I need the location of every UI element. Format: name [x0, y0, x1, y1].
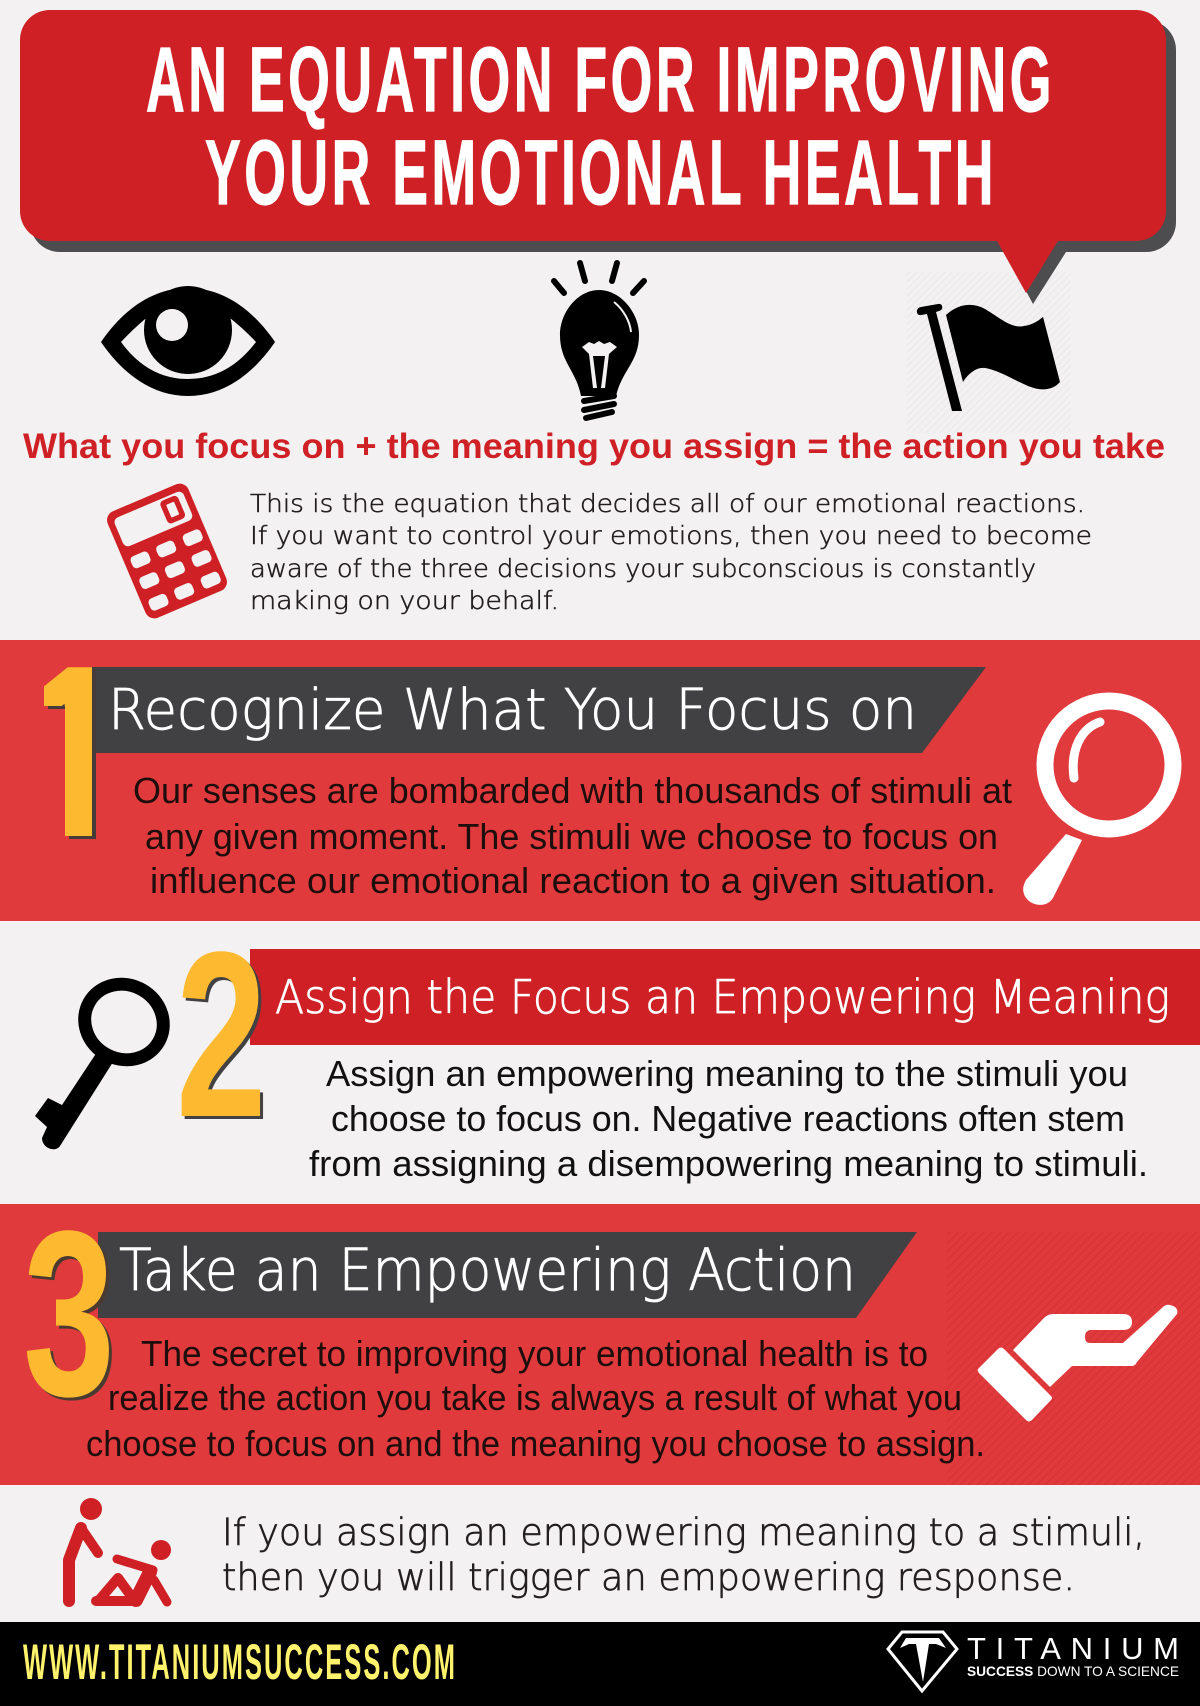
- intro paragraph: This is the equation that decides all of our emotional reactions.: [250, 489, 1085, 518]
- step 2 body: Assign an empowering meaning to the stimuli you: [326, 1053, 1128, 1094]
- step 3 number: 3: [23, 1183, 115, 1446]
- step 1 heading ribbon: [92, 667, 986, 753]
- intro paragraph: If you want to control your emotions, then you need to become: [250, 521, 1092, 550]
- icon: eye: [101, 286, 275, 396]
- footer bar: [0, 1622, 1200, 1706]
- title text: [146, 29, 1055, 224]
- icon: key: [35, 970, 177, 1149]
- step 1 number: 1: [26, 621, 133, 891]
- step 1 number: [44, 667, 96, 839]
- icon: light bulb: [554, 263, 644, 418]
- step 1 body: influence our emotional reaction to a given situation.: [150, 860, 996, 901]
- step 2 number: 2: [179, 905, 270, 1169]
- step 2 body: from assigning a disempowering meaning to stimuli.: [309, 1143, 1148, 1184]
- step 3 number: 3: [26, 1186, 118, 1449]
- icon: person helping another up: [69, 1498, 171, 1602]
- panel: step 1: [0, 618, 1200, 921]
- step 2 number: 2: [176, 902, 267, 1166]
- step 1 number: 1: [22, 618, 129, 888]
- logo wordmark: TITANIUM: [967, 1631, 1179, 1666]
- closing text: then you will trigger an empowering response.: [222, 1556, 1075, 1599]
- step 3 body: realize the action you take is always a result of what you: [108, 1377, 962, 1418]
- logo: titanium diamond: [888, 1632, 957, 1691]
- panel: step 2: [35, 902, 1200, 1184]
- step 3 body: choose to focus on and the meaning you choose to assign.: [86, 1423, 985, 1464]
- step 1 body: any given moment. The stimuli we choose to focus on: [145, 816, 998, 857]
- intro paragraph: aware of the three decisions your subconscious is constantly: [250, 554, 1036, 583]
- panel: closing statement: [69, 1498, 1145, 1602]
- title speech bubble: [20, 10, 1176, 304]
- icon: flag: [917, 304, 1060, 411]
- flag backdrop hatch: [907, 272, 1071, 433]
- step 2 body: choose to focus on. Negative reactions often stem: [331, 1098, 1125, 1139]
- panel: step 3: [0, 1183, 1200, 1485]
- step 3 heading: Take an Empowering Action: [119, 1236, 856, 1304]
- closing text: If you assign an empowering meaning to a stimuli,: [222, 1511, 1145, 1554]
- step 1 body: Our senses are bombarded with thousands of stimuli at: [133, 770, 1012, 811]
- step 1 body: [133, 770, 1012, 901]
- step 2 body: [309, 1053, 1148, 1184]
- intro paragraph: [250, 489, 1092, 615]
- equation headline: What you focus on + the meaning you assign = the action you take: [23, 427, 1165, 466]
- logo wordmark: SUCCESS DOWN TO A SCIENCE: [967, 1663, 1179, 1679]
- icon: open hand: [978, 1305, 1177, 1422]
- step 3 body: [86, 1333, 985, 1464]
- intro paragraph: making on your behalf.: [250, 586, 559, 615]
- step 2 heading band: [250, 949, 1200, 1045]
- website url: WWW.TITANIUMSUCCESS.COM: [23, 1634, 457, 1690]
- step 1 heading: Recognize What You Focus on: [108, 678, 917, 743]
- closing text: [222, 1511, 1145, 1599]
- icon: magnifying glass: [1023, 701, 1173, 905]
- step 3 heading ribbon: [98, 1232, 917, 1318]
- icon: calculator: [104, 481, 230, 621]
- step 3 body: The secret to improving your emotional health is to: [141, 1333, 928, 1374]
